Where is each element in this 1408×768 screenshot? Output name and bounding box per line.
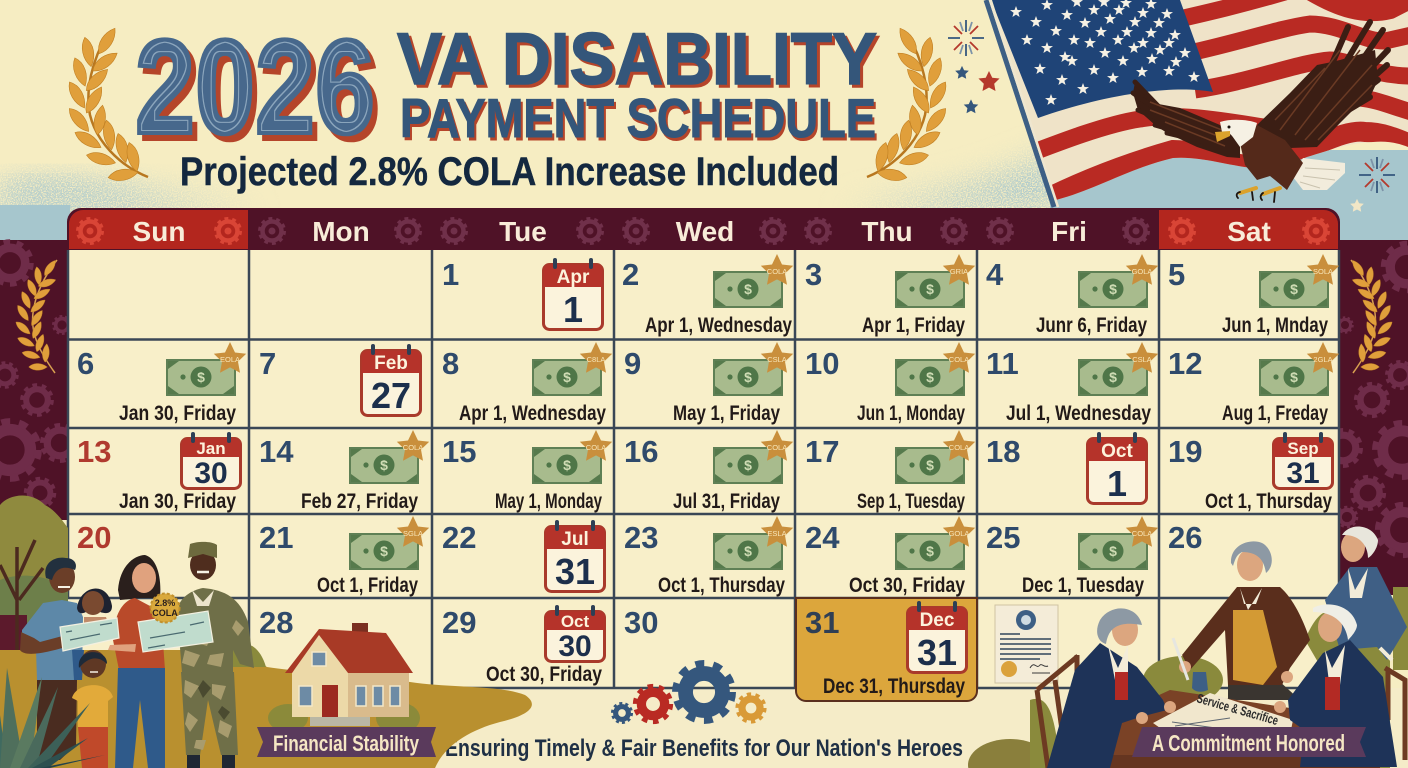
day 15: 15 (442, 434, 476, 469)
day 9: 9 (624, 346, 641, 381)
day 14: Feb 27, Friday (301, 490, 418, 513)
day 23: $ (744, 543, 752, 559)
day 15: $ (563, 457, 571, 473)
day 16: Jul 31, Friday (673, 490, 780, 513)
day 24 (805, 516, 975, 597)
day 4: $ (1109, 281, 1117, 297)
ribbon: A Commitment Honored: A Commitment Honored (1152, 730, 1345, 756)
check right (138, 611, 213, 652)
day 13: Jan (196, 439, 226, 458)
header bar: Sat (1227, 216, 1271, 247)
day 19 (1168, 432, 1332, 513)
header bar: Tue (499, 216, 547, 247)
day 17: 17 (805, 434, 839, 469)
back right founder (1325, 526, 1407, 660)
ribbon: Financial Stability: Financial Stability (273, 731, 420, 756)
day 22 (442, 520, 604, 592)
day 15 (442, 430, 612, 513)
day 4: 4 (986, 257, 1004, 292)
quill (1173, 638, 1188, 680)
day 31 highlighted: Dec (920, 610, 955, 631)
day 31 highlighted: Dec 31, Thursday (823, 675, 965, 698)
side gear pattern (0, 242, 1408, 555)
ribbon: Financial Stability (257, 727, 436, 757)
day 21: Oct 1, Friday (317, 574, 418, 597)
body (1240, 125, 1303, 190)
header bar: Thu (861, 216, 913, 247)
day 10: COLA (949, 355, 969, 364)
day 15: COLA (586, 443, 606, 452)
day 13 (77, 432, 240, 513)
day 12: 2GLA (1313, 355, 1333, 364)
day 11: CSLA (1132, 355, 1152, 364)
day 23: 23 (624, 520, 658, 555)
day 29: 29 (442, 605, 476, 640)
day 12: Aug 1, Freday (1222, 402, 1328, 425)
day 5 (1168, 254, 1339, 337)
day 8: C8LA (587, 355, 605, 364)
day 29: Oct (561, 612, 590, 631)
day 14 (259, 430, 429, 513)
day 6 (77, 342, 246, 425)
day 10: Jun 1, Monday (857, 402, 965, 425)
illustration: family and soldier scene (0, 496, 532, 768)
day 8: Apr 1, Wednesday (459, 402, 606, 425)
day 16: $ (744, 457, 752, 473)
day 14: $ (380, 457, 388, 473)
left seated founder (1047, 608, 1176, 768)
title: VA Disability: VA DISABILITY (400, 22, 880, 103)
day 18: 1 (1107, 463, 1127, 504)
icon: fireworks and stars (948, 20, 1395, 212)
day 17 (805, 430, 975, 513)
day 17: Sep 1, Tuesday (857, 490, 965, 513)
inkwell (1192, 672, 1208, 692)
illustration: American flag (980, 0, 1408, 212)
day 16: 16 (624, 434, 658, 469)
illustration: founders signing at table (968, 526, 1408, 768)
day 18: Oct (1101, 441, 1134, 462)
COLA medal: 2.8% (155, 598, 175, 608)
day 10 (805, 342, 975, 425)
day 3: GRIA (950, 267, 968, 276)
illustration: bald eagle (1133, 22, 1388, 202)
day 6: $ (197, 369, 205, 385)
day 5: $ (1290, 281, 1298, 297)
tail (1293, 158, 1345, 190)
subtitle: Projected 2.8% COLA Increase Included (180, 150, 839, 194)
icon: small right laurel (1350, 258, 1394, 373)
day 20: 20 (77, 520, 111, 555)
header bar: Wed (676, 216, 734, 247)
day 18 (986, 432, 1146, 504)
day 29: Oct 30, Friday (486, 663, 602, 686)
day 7: 27 (371, 375, 411, 416)
day 9: $ (744, 369, 752, 385)
icon: left laurel (65, 25, 148, 183)
day 8 (442, 342, 612, 425)
day 25: $ (1109, 543, 1117, 559)
header bar: Fri (1051, 216, 1087, 247)
day 21: SGLA (403, 529, 423, 538)
day 12: $ (1290, 369, 1298, 385)
day 3: Apr 1, Friday (862, 314, 965, 337)
foliage (968, 739, 1052, 768)
calendar grid background (67, 250, 1340, 688)
day 9: CSLA (767, 355, 787, 364)
day 24: GOLA (949, 529, 969, 538)
title: VA Disability: VA DISABILITY (397, 19, 877, 100)
day 6: EOLA (220, 355, 240, 364)
day 2: 2 (622, 257, 639, 292)
header bar: Sun (133, 216, 185, 247)
grid lines (67, 250, 1340, 688)
title: 2026: 2026 (140, 19, 380, 168)
olive bush backdrop (0, 496, 68, 615)
day 30: 30 (624, 605, 658, 640)
day 21: $ (380, 543, 388, 559)
table (1067, 690, 1380, 768)
day 19: Sep (1287, 439, 1319, 458)
day 16 (624, 430, 793, 513)
day 1: 1 (563, 289, 583, 330)
day 17: COLA (949, 443, 969, 452)
day 22: 31 (555, 551, 595, 592)
day 5: SOLA (1313, 267, 1333, 276)
day 22: 22 (442, 520, 476, 555)
day 26: 26 (1168, 520, 1202, 555)
day 2: $ (744, 281, 752, 297)
day 8: 8 (442, 346, 459, 381)
right wing (1257, 50, 1378, 148)
day 18: 18 (986, 434, 1020, 469)
gears cluster (612, 664, 765, 723)
day 5: 5 (1168, 257, 1185, 292)
day 4 (986, 254, 1158, 337)
COLA medal (150, 594, 180, 622)
day 7 (259, 344, 420, 416)
day 23: Oct 1, Thursday (658, 574, 785, 597)
day 5: Jun 1, Mnday (1222, 314, 1328, 337)
day 21 (259, 516, 429, 597)
day 2: Apr 1, Wednesday (645, 314, 792, 337)
day 12: 12 (1168, 346, 1202, 381)
day 2: COLA (767, 267, 787, 276)
day 22: Jul (561, 529, 589, 550)
day 23 (624, 516, 793, 597)
check left (60, 618, 119, 651)
day 9: May 1, Friday (673, 402, 780, 425)
day 19: 31 (1286, 457, 1320, 490)
day 29: 30 (558, 630, 592, 663)
day 19: Oct 1, Thursday (1205, 490, 1332, 513)
ground (0, 650, 532, 768)
day 10: 10 (805, 346, 839, 381)
day 7: 7 (259, 346, 276, 381)
day 25: Dec 1, Tuesday (1022, 574, 1144, 597)
day 25: COLA (1132, 529, 1152, 538)
day 13: 30 (194, 457, 228, 490)
day 12 (1168, 342, 1339, 425)
day 24: Oct 30, Friday (849, 574, 965, 597)
day 25 (986, 516, 1158, 597)
title: Payment Schedule: PAYMENT SCHEDULE (400, 87, 876, 149)
agave plant (0, 668, 105, 768)
talons (1237, 188, 1280, 202)
day 2 (622, 254, 793, 337)
day 31 highlighted (796, 598, 977, 701)
scroll text: Service & Sacrifice (1195, 690, 1280, 728)
header bar: Mon (312, 216, 370, 247)
day 23: ESLA (767, 529, 787, 538)
title: 2026: 2026 (135, 13, 375, 162)
day 1: Apr (557, 267, 590, 288)
header bar (67, 208, 1340, 250)
day 1 (442, 257, 602, 330)
day 24: 24 (805, 520, 840, 555)
illustration: house (268, 623, 420, 734)
day 6: 6 (77, 346, 94, 381)
day 8: $ (563, 369, 571, 385)
boy (72, 650, 113, 768)
day 4: GOLA (1132, 267, 1152, 276)
day 21: 21 (259, 520, 293, 555)
day 11: Jul 1, Wednesday (1006, 402, 1151, 425)
illustration: document with seal (995, 605, 1058, 683)
COLA medal: COLA (152, 608, 178, 618)
day 29 (442, 605, 604, 686)
chairs (1037, 655, 1405, 768)
day 13: 13 (77, 434, 111, 469)
girl (72, 589, 112, 680)
father (20, 558, 83, 760)
day 17: $ (926, 457, 934, 473)
day 11: $ (1109, 369, 1117, 385)
standing founder (1179, 541, 1310, 700)
head (1220, 120, 1257, 147)
day 3 (805, 254, 975, 337)
day 15: May 1, Monday (495, 490, 602, 513)
day 1: 1 (442, 257, 459, 292)
day 25: 25 (986, 520, 1020, 555)
day 10: $ (926, 369, 934, 385)
day 28: 28 (259, 605, 293, 640)
day 14: 14 (259, 434, 294, 469)
icon: small left laurel (14, 258, 58, 373)
day 31 highlighted: 31 (805, 605, 839, 640)
day 9 (624, 342, 793, 425)
day 24: $ (926, 543, 934, 559)
day 3: 3 (805, 257, 822, 292)
tree (0, 540, 43, 650)
day 4: Junr 6, Friday (1036, 314, 1147, 337)
day 7: Feb (374, 353, 408, 374)
day 6: Jan 30, Friday (119, 402, 236, 425)
day 3: $ (926, 281, 934, 297)
calendar (67, 208, 1340, 701)
beak (1215, 131, 1230, 142)
title: Payment Schedule: PAYMENT SCHEDULE (402, 90, 878, 152)
left wing (1133, 82, 1240, 158)
day 14: COLA (403, 443, 423, 452)
day 16: COLA (767, 443, 787, 452)
day 31 highlighted: 31 (917, 632, 957, 673)
day 11 (986, 342, 1158, 425)
day 19: 19 (1168, 434, 1202, 469)
soldier (177, 542, 254, 768)
woman (108, 555, 165, 768)
ribbon: A Commitment Honored (1132, 727, 1366, 757)
day 13: Jan 30, Friday (119, 490, 236, 513)
right seated founder (1274, 604, 1397, 767)
tagline: Ensuring Timely & Fair Benefits for Our Nation's Heroes (445, 735, 963, 762)
icon: right laurel (867, 25, 950, 183)
day 11: 11 (986, 346, 1019, 381)
